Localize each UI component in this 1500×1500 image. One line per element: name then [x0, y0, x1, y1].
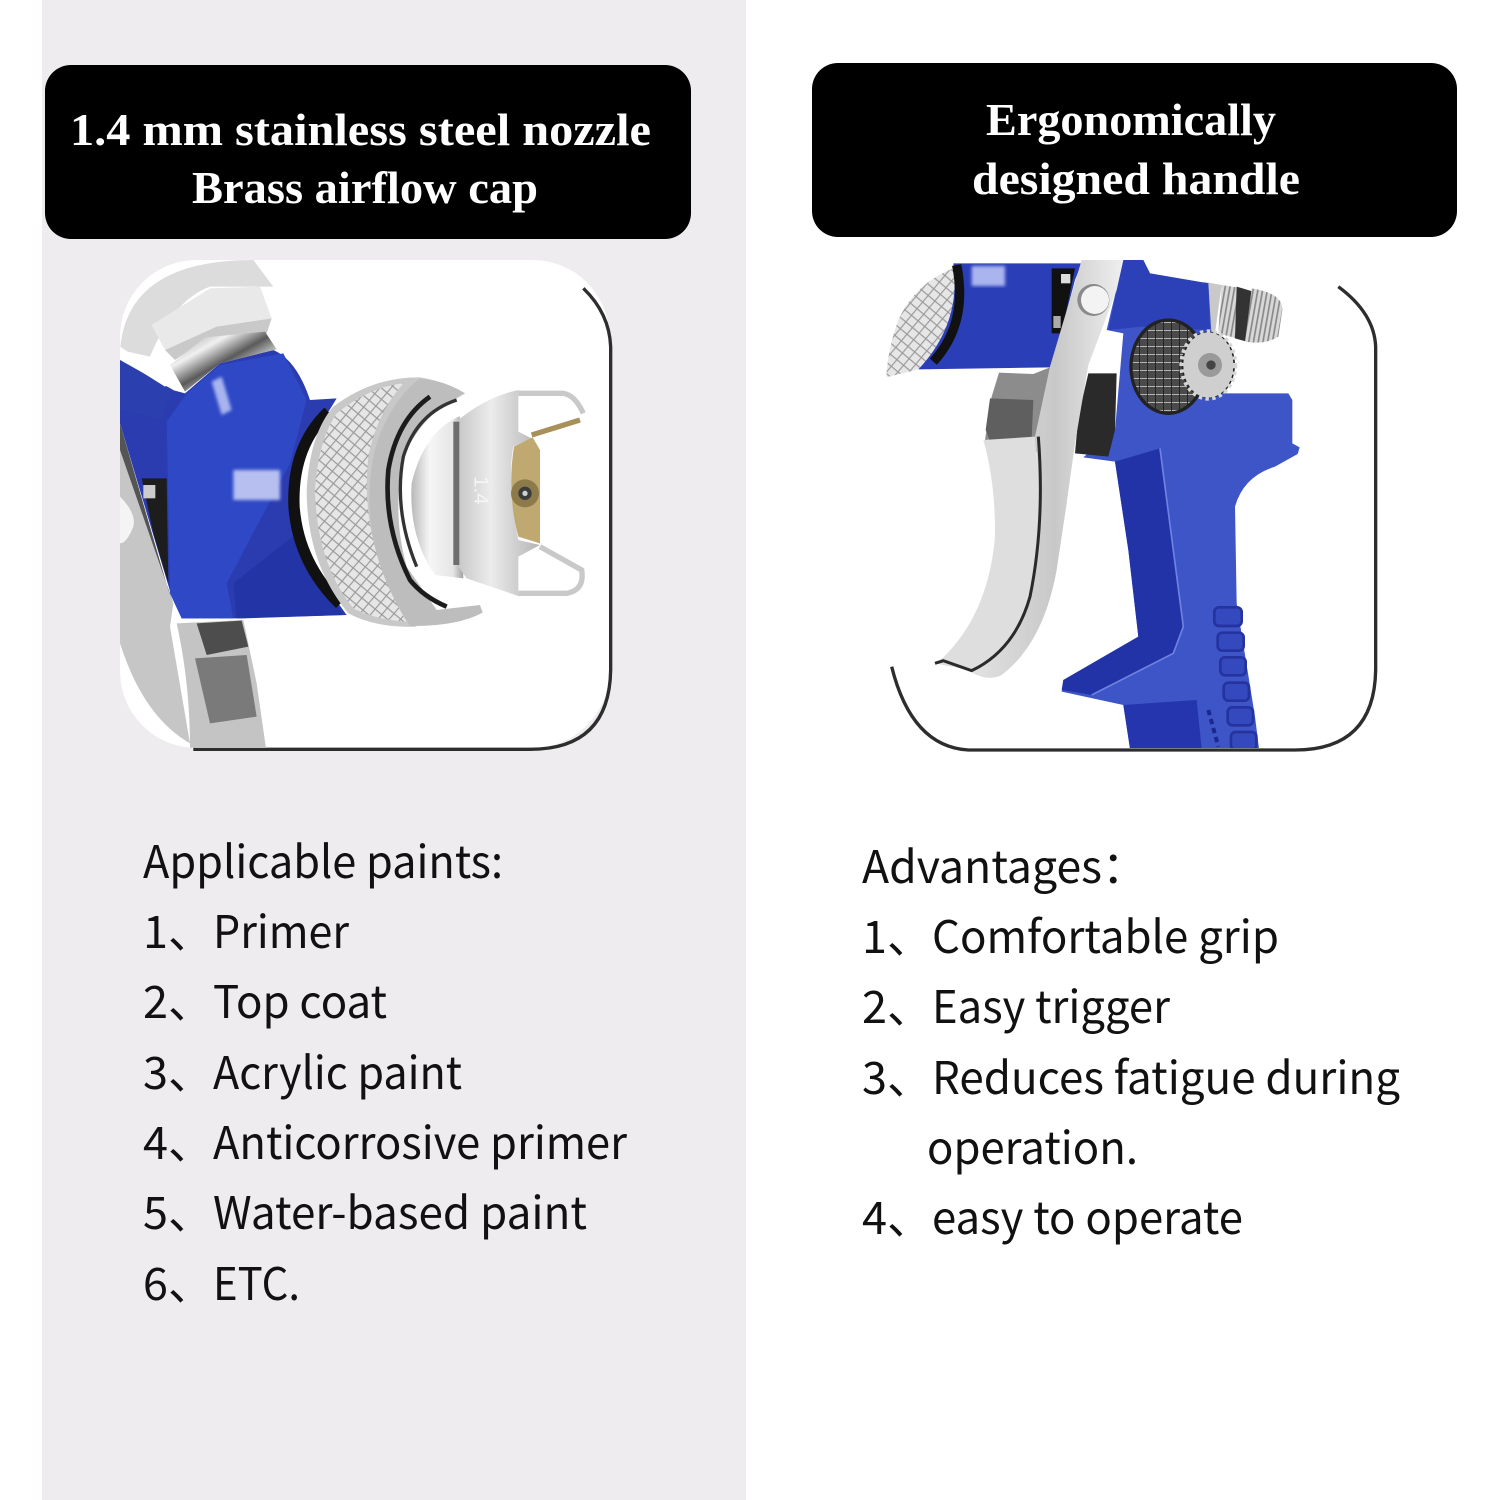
list: applicable paints: ETC. [213, 1248, 300, 1313]
icon: trigger and lower fitting [120, 423, 266, 748]
icon: hex nut [120, 287, 277, 392]
icon: steel trigger [935, 260, 1123, 678]
icon: gun head [918, 263, 1082, 369]
heading: handle [812, 63, 1457, 237]
list: applicable paints: 、 [168, 966, 213, 1031]
icon: front knurled cap [886, 268, 955, 377]
heading: nozzle: 1.4 mm stainless steel nozzle [70, 105, 651, 155]
text: nozzle size: 1.4 [470, 476, 493, 505]
list: applicable paints: 3 [143, 1037, 168, 1102]
icon: blue grip body [1062, 260, 1300, 750]
list: advantages: 1 [862, 901, 887, 966]
list: applicable paints [143, 826, 628, 1313]
icon: rear adjustment screw [1200, 282, 1282, 343]
list: applicable paints: 、 [168, 896, 213, 961]
heading: nozzle [45, 65, 691, 239]
list: advantages: Advantages [862, 831, 1102, 896]
icon: knurled collar [307, 377, 483, 627]
list: advantages: 4 [862, 1182, 887, 1247]
list: advantages: ： [1102, 831, 1147, 896]
list: applicable paints: 5 [143, 1177, 168, 1242]
heading: handle: Ergonomically [986, 95, 1277, 145]
list: applicable paints: Applicable paints: [143, 826, 503, 891]
icon: black seal ring [294, 412, 340, 604]
list: applicable paints: Anticorrosive primer [213, 1107, 628, 1172]
list: applicable paints: 2 [143, 966, 168, 1031]
list: applicable paints: Water-based paint [213, 1177, 587, 1242]
list: advantages: 2 [862, 971, 887, 1036]
list: applicable paints: 6 [143, 1248, 168, 1313]
list: applicable paints: 、 [168, 1037, 213, 1102]
heading: nozzle: Brass airflow cap [192, 163, 538, 213]
list: advantages [862, 831, 1400, 1247]
list: applicable paints: 、 [168, 1177, 213, 1242]
list: applicable paints: 、 [168, 1107, 213, 1172]
list: applicable paints: 4 [143, 1107, 168, 1172]
list: advantages: easy to operate [932, 1182, 1243, 1247]
list: advantages: 、 [887, 1042, 932, 1107]
list: applicable paints: Primer [213, 896, 350, 961]
list: advantages: Reduces fatigue during [932, 1042, 1400, 1107]
icon: trigger mechanism [1075, 373, 1117, 457]
panel: handle photo [886, 260, 1376, 750]
list: advantages: 、 [887, 971, 932, 1036]
icon: grey hose band [120, 260, 273, 357]
heading: handle: designed handle [972, 154, 1300, 204]
list: applicable paints: 、 [168, 1248, 213, 1313]
list: advantages: 、 [887, 1182, 932, 1247]
list: advantages: Comfortable grip [932, 901, 1279, 966]
list: applicable paints: 1 [143, 896, 168, 961]
list: applicable paints: Acrylic paint [213, 1037, 462, 1102]
icon: air cap [411, 390, 583, 596]
icon: blue body [120, 350, 347, 618]
list: advantages: 3 [862, 1042, 887, 1107]
icon: adjustment knob [1131, 320, 1235, 413]
list: advantages: Easy trigger [932, 971, 1171, 1036]
left grey column background [42, 0, 746, 1500]
list: advantages: 、 [887, 901, 932, 966]
list: advantages: operation. [927, 1112, 1138, 1177]
list: applicable paints: Top coat [213, 966, 387, 1031]
panel: nozzle photo [120, 260, 611, 749]
